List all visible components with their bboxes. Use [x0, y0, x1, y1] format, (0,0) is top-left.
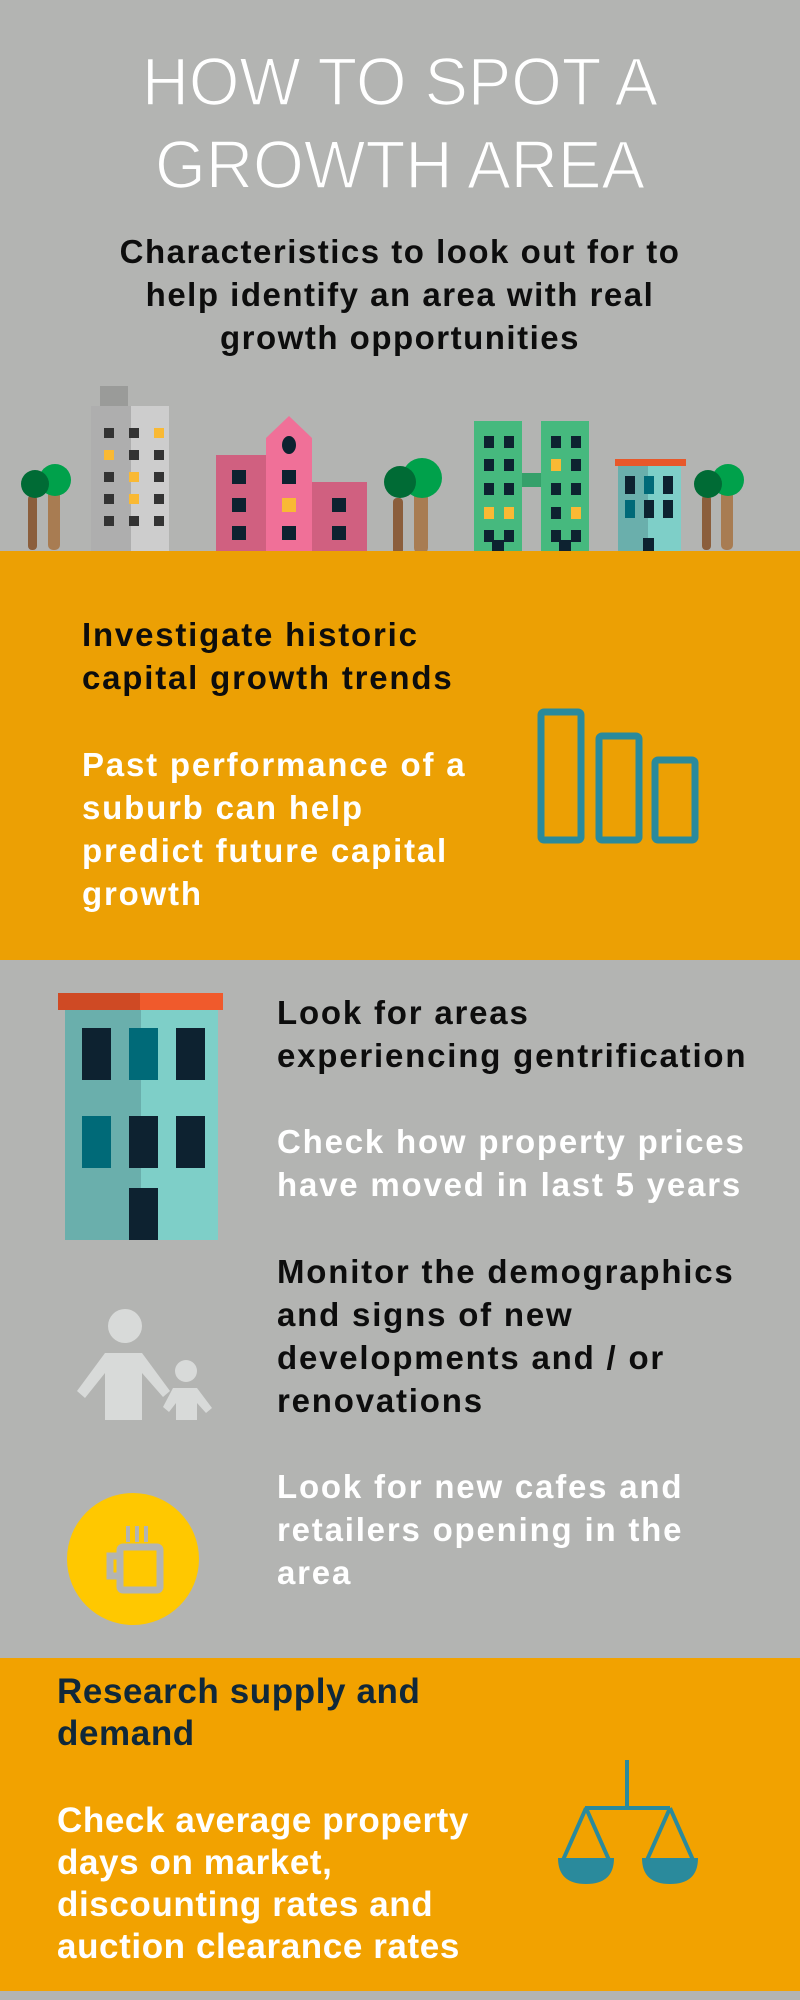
text: cafes: area [277, 1554, 352, 1591]
text: check average: discounting rates and [57, 1885, 433, 1924]
trees middle [384, 458, 442, 554]
text: demographics: renovations [277, 1382, 484, 1419]
text: gentrification: experiencing gentrification [277, 1037, 747, 1074]
text: demographics: and signs of new [277, 1296, 574, 1333]
text: past performance: growth [82, 875, 203, 912]
title [142, 44, 659, 200]
title: HOW TO SPOT A [142, 44, 659, 120]
panel: historic capital growth [0, 551, 800, 960]
green towers [474, 421, 589, 555]
text: check average: auction clearance rates [57, 1927, 460, 1966]
heading: research supply: Research supply and [57, 1672, 420, 1711]
text: cafes [277, 1468, 683, 1591]
icon: coffee cup [67, 1493, 199, 1625]
subtitle: help identify an area with real [146, 276, 654, 313]
icon: parent and child [77, 1309, 212, 1420]
text: check average: Check average property [57, 1801, 469, 1840]
trees left [21, 464, 71, 550]
subtitle [120, 233, 680, 356]
trees right [694, 464, 744, 550]
heading: research supply: demand [57, 1714, 195, 1753]
pink building [216, 416, 367, 555]
icon: bar chart [538, 708, 698, 844]
text: past performance [82, 746, 466, 912]
text: cafes: Look for new cafes and [277, 1468, 683, 1505]
text: past performance: predict future capital [82, 832, 448, 869]
subtitle: growth opportunities [220, 319, 580, 356]
small teal building [615, 459, 686, 554]
heading: investigate historic: capital growth trends [82, 659, 454, 696]
panel: supply and demand [0, 1658, 800, 1991]
text: check average: days on market, [57, 1843, 332, 1882]
heading: investigate historic: Investigate historic [82, 616, 419, 653]
text: demographics: developments and / or [277, 1339, 665, 1376]
text: property prices: Check how property prices [277, 1123, 746, 1160]
icon: scales [558, 1760, 698, 1884]
text: demographics: Monitor the demographics [277, 1253, 735, 1290]
text: gentrification: Look for areas [277, 994, 530, 1031]
text: check average [57, 1801, 469, 1966]
heading: investigate historic [82, 616, 454, 696]
grey tower [91, 386, 169, 556]
text: cafes: retailers opening in the [277, 1511, 683, 1548]
city skyline illustration [21, 386, 744, 551]
subtitle: Characteristics to look out for to [120, 233, 680, 270]
heading: research supply [57, 1672, 420, 1753]
text: past performance: suburb can help [82, 789, 364, 826]
text: past performance: Past performance of a [82, 746, 466, 783]
text: property prices [277, 1123, 746, 1203]
text: gentrification [277, 994, 747, 1074]
text: property prices: have moved in last 5 years [277, 1166, 742, 1203]
text: demographics [277, 1253, 735, 1419]
icon: teal building [58, 993, 223, 1240]
